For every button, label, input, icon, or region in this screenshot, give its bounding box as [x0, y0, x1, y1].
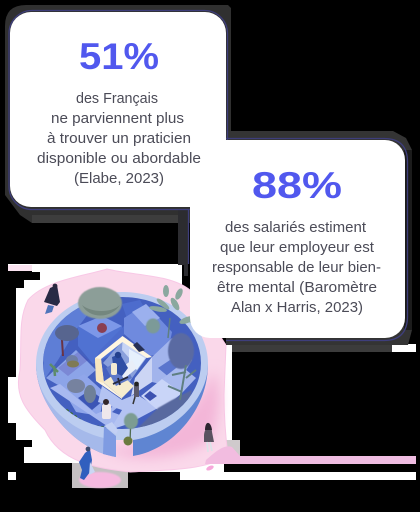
upper left wall [44, 308, 86, 378]
maze blocks [43, 298, 196, 440]
tree base block [78, 326, 122, 364]
right step block [152, 338, 192, 388]
entrance plant [124, 413, 138, 446]
tree top [78, 287, 122, 333]
right palm plant [168, 365, 196, 400]
block behind cubicle [122, 300, 143, 336]
card 1 panel [10, 12, 226, 207]
card 2 description: des salariés estiment [225, 220, 366, 236]
flower bed lower right [138, 390, 192, 428]
card 2 description: Alan x Harris, 2023) [231, 300, 363, 316]
hedge [54, 398, 108, 440]
flower bed right [168, 333, 194, 369]
desk worker [111, 352, 128, 385]
left wall face lighter [36, 364, 116, 457]
rim top [36, 292, 208, 440]
person: right woman [204, 423, 214, 452]
top right block [124, 304, 172, 356]
plant at top right [149, 285, 201, 338]
card 2 description: que leur employeur est [220, 240, 374, 256]
person: standing near cubicle [133, 382, 139, 404]
maze illustration [36, 285, 208, 457]
small floor mark [206, 464, 214, 472]
pink blob behind the maze [18, 269, 228, 472]
card 1 figure: 51% [79, 36, 159, 77]
person: top-left walker [44, 284, 60, 314]
plant small [146, 318, 160, 334]
square ring block [141, 379, 180, 410]
card 1 description [37, 91, 201, 187]
card 1 description: (Elabe, 2023) [74, 171, 164, 187]
centre path [98, 386, 158, 430]
card 1 description: à trouver un praticien [47, 131, 191, 147]
left pot plant [66, 355, 78, 363]
card 2 panel [190, 140, 405, 338]
left steps [46, 350, 96, 387]
interior back walls [103, 341, 147, 384]
illustration backdrop [8, 264, 416, 488]
card 1 description: ne parviennent plus [51, 111, 184, 127]
card halos [5, 5, 412, 345]
card 2 description: responsable de leur bien- [212, 260, 381, 276]
tree left [55, 325, 79, 356]
entrance walls [103, 426, 116, 457]
card 2 figure: 88% [252, 165, 342, 206]
card 2 outline [188, 138, 408, 340]
card 2 description: être mental (Baromètre [217, 280, 377, 296]
cream wall rim [95, 336, 152, 399]
floor spot under woman [205, 446, 240, 464]
monitor [129, 349, 145, 370]
shadow ground glow [90, 370, 219, 458]
cubicle floor [103, 372, 134, 398]
card 1 description: disponible ou abordable [37, 151, 201, 167]
cubicle side panel [131, 357, 152, 396]
desk [118, 360, 137, 379]
maze floor [43, 297, 201, 429]
planter foliage [67, 379, 85, 393]
wall around hedge [50, 384, 120, 425]
person behind cubicle [133, 342, 145, 352]
floor spot under walker [79, 472, 121, 488]
person: lower-left blue walker [79, 447, 95, 480]
small left plant [50, 364, 58, 376]
person: seated woman [102, 399, 111, 419]
card 2 description [212, 220, 381, 316]
central office cubicle [95, 336, 152, 399]
card 1 outline [9, 10, 228, 210]
lower-left planter [68, 377, 102, 414]
outer wall face [36, 364, 208, 457]
card 1 description: des Français [76, 91, 158, 107]
